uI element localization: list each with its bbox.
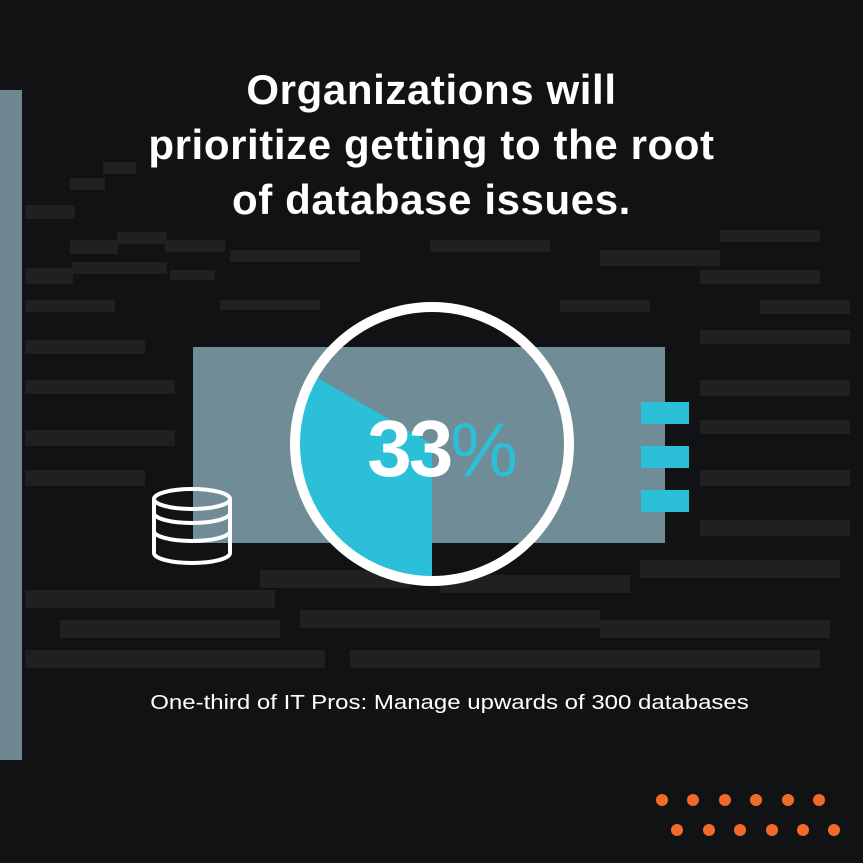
left accent bar xyxy=(0,90,22,760)
orange dots xyxy=(656,794,840,836)
title xyxy=(148,66,715,223)
title: of database issues. xyxy=(232,176,631,223)
icon: database xyxy=(154,489,230,563)
title: prioritize getting to the root xyxy=(148,121,715,168)
percentage: 33% xyxy=(367,404,515,493)
chart: pie in rectangle xyxy=(193,307,665,581)
caption: One-third of IT Pros: Manage upwards of 300 databases xyxy=(150,692,749,714)
title: Organizations will xyxy=(246,66,617,113)
right cyan bars xyxy=(641,402,689,512)
